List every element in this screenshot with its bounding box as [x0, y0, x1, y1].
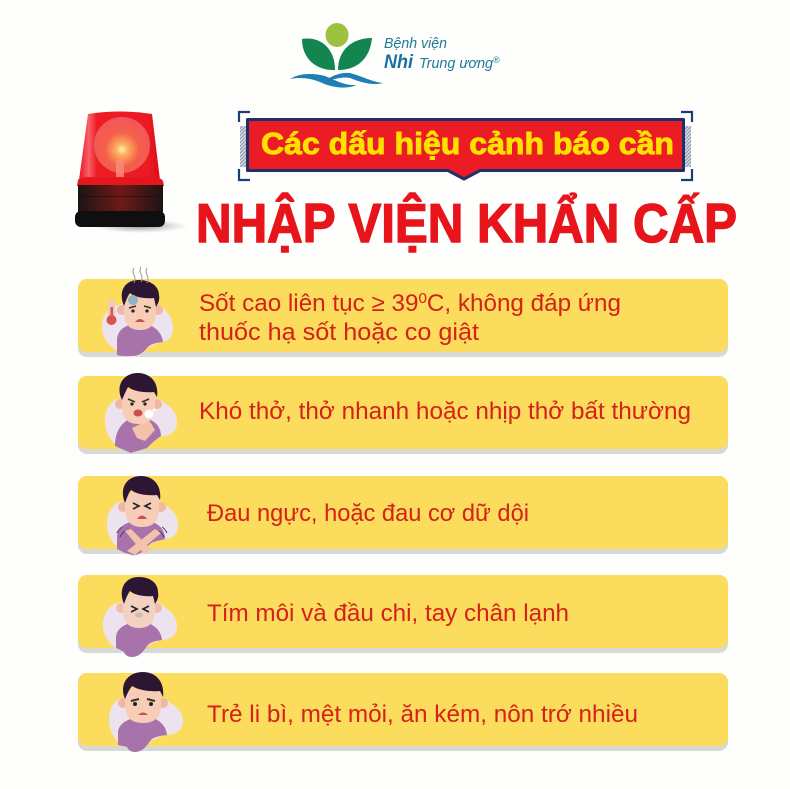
icon: child with fever and thermometer — [102, 267, 173, 357]
symptom text: thuốc hạ sốt hoặc co giật — [199, 319, 479, 346]
icon: child short of breath — [105, 373, 177, 453]
symptom text: 0 — [418, 290, 427, 307]
logo text: Trung ương — [419, 55, 494, 72]
panel: symptom 4 cyanosis — [78, 575, 728, 657]
panel: symptom 1 fever — [78, 267, 728, 357]
symptom text: C, không đáp ứng — [427, 290, 621, 317]
panel: symptom 3 chest pain — [78, 476, 728, 556]
heading: NHẬP VIỆN KHẨN CẤP: NHẬP VIỆN KHẨN CẤP — [196, 192, 737, 254]
logo text: ® — [493, 55, 500, 65]
panel: symptom 5 lethargy — [78, 672, 728, 752]
card background — [78, 673, 728, 751]
banner box — [248, 120, 684, 179]
card background — [78, 575, 728, 653]
card background — [78, 279, 728, 357]
icon: child with chest pain — [107, 476, 178, 556]
symptom text — [199, 290, 621, 346]
symptom text: Khó thở, thở nhanh hoặc nhịp thở bất thường — [199, 398, 691, 425]
icon: child with pale face — [103, 577, 177, 657]
heading banner: Các dấu hiệu cảnh báo cần — [239, 112, 692, 180]
panel: symptom 2 breathing — [78, 373, 728, 454]
logo text: Nhi — [384, 52, 414, 73]
symptom text: Tím môi và đầu chi, tay chân lạnh — [207, 600, 569, 627]
icon: tired child — [109, 672, 183, 752]
banner side hatches — [240, 126, 691, 167]
symptom text: Trẻ li bì, mệt mỏi, ăn kém, nôn trớ nhiều — [207, 701, 638, 728]
symptom text: Sốt cao liên tục ≥ 39 — [199, 290, 416, 317]
logo text: Bệnh viện — [384, 35, 447, 52]
icon: red siren light — [75, 112, 188, 233]
logo: Bệnh viện Nhi Trung ương — [290, 23, 500, 88]
logo icon — [290, 23, 383, 88]
symptom text: Đau ngực, hoặc đau cơ dữ dội — [207, 500, 529, 527]
logo text — [384, 35, 500, 73]
card background — [78, 376, 728, 454]
banner text: Các dấu hiệu cảnh báo cần — [261, 126, 674, 161]
banner corner brackets — [239, 112, 692, 180]
card background — [78, 476, 728, 554]
